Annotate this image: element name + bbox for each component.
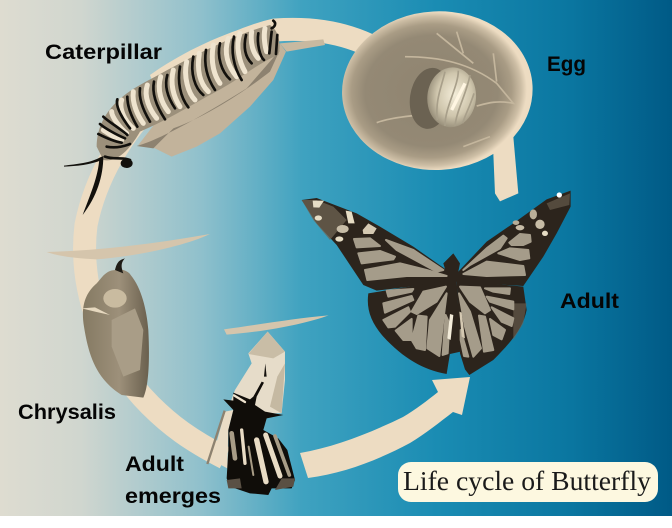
chrysalis highlight	[103, 289, 127, 308]
caterpillar on leaf	[64, 20, 325, 215]
leaf top edge	[150, 20, 273, 83]
cream segments	[103, 28, 267, 140]
egg ridges	[437, 71, 474, 126]
label: Chrysalis: Chrysalis	[18, 401, 116, 424]
leaf twig	[280, 39, 325, 52]
leaf veins	[377, 32, 513, 147]
chrysalis stem	[115, 258, 125, 273]
egg on leaf	[338, 6, 537, 201]
egg shadow	[406, 65, 454, 131]
egg	[424, 65, 479, 130]
folded wing stripes	[232, 395, 289, 482]
chrysalis	[47, 234, 210, 398]
caterpillar body	[97, 25, 280, 160]
leaf stem	[493, 137, 518, 201]
title badge	[398, 462, 658, 502]
label: Adult emerges: Adult	[125, 453, 184, 476]
emergence twig	[224, 315, 329, 335]
wings	[302, 191, 571, 375]
emerged body	[223, 382, 295, 495]
label: Caterpillar: Caterpillar	[45, 41, 162, 64]
black stripes	[98, 21, 277, 160]
caterpillar head filaments	[64, 157, 102, 167]
wing spots	[313, 192, 562, 340]
cream wing wedge	[212, 410, 233, 468]
adult emerging	[207, 382, 295, 495]
label: Egg: Egg	[547, 53, 586, 76]
wing tip shading	[302, 193, 570, 340]
hanging leaf	[138, 43, 286, 157]
wing cells	[354, 234, 531, 357]
adult butterfly	[302, 191, 571, 375]
empty chrysalis shell	[230, 332, 285, 413]
chrysalis twig	[47, 234, 210, 259]
shell slit	[264, 363, 267, 377]
label: Adult: Adult	[560, 290, 619, 313]
cycle ring arc	[85, 29, 375, 458]
leaf	[338, 6, 537, 175]
chrysalis body	[83, 269, 149, 398]
emerging chrysalis shell	[224, 315, 329, 413]
label: Adult emerges: emerges	[125, 485, 221, 508]
arrow: adult emerges to adult	[300, 377, 470, 478]
wing base shading	[227, 478, 295, 490]
support stick	[207, 411, 225, 464]
title badge: Life cycle of Butterfly	[403, 466, 651, 496]
